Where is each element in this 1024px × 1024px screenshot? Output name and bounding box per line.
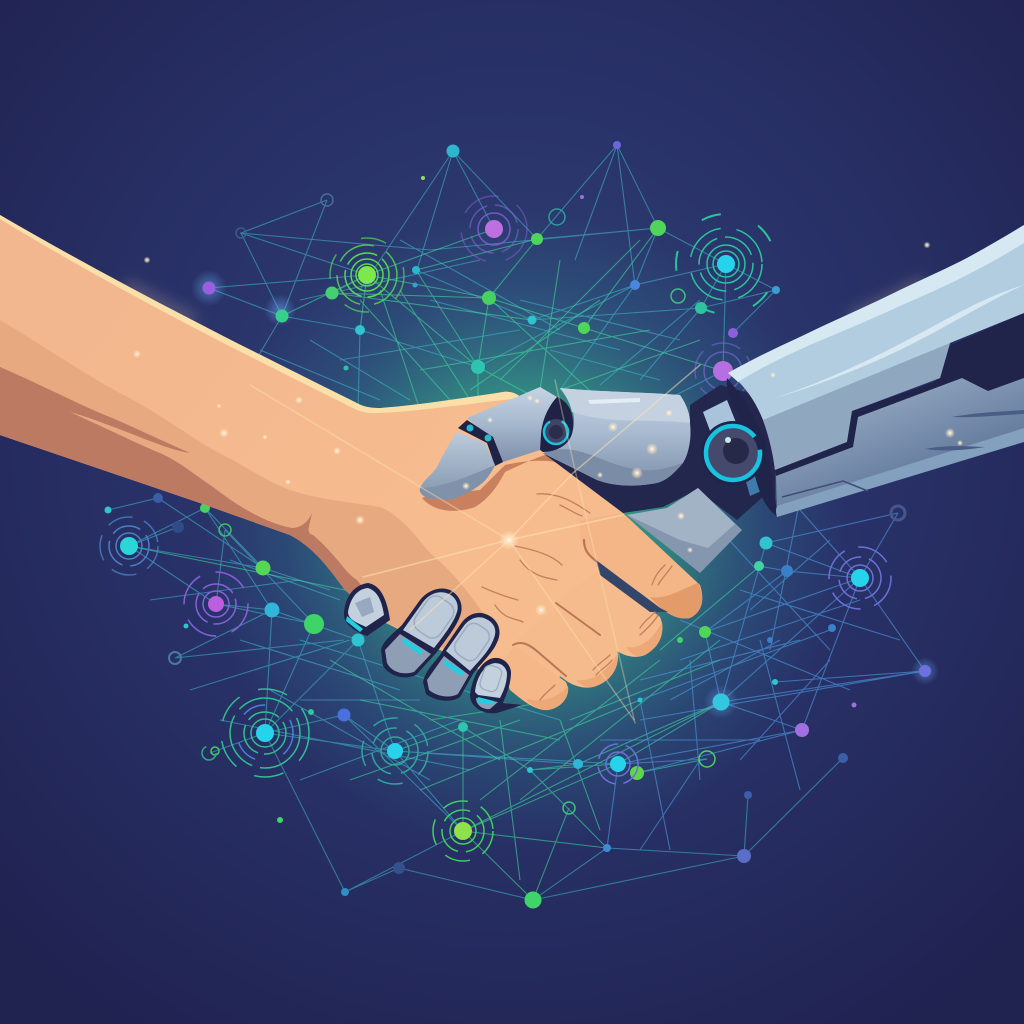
palm highlight stroke — [588, 398, 640, 404]
forearm lower shade — [763, 343, 950, 470]
forearm streak — [772, 285, 1024, 399]
pinky finger shade — [525, 686, 568, 710]
human arm and hand — [0, 215, 702, 710]
wrist eye joint — [701, 421, 765, 485]
light flare over handshake — [250, 365, 700, 723]
pinky finger — [500, 645, 568, 710]
hub: purple right of cuff — [695, 343, 751, 399]
thumb band lights — [466, 424, 492, 442]
forearm scratch marks — [925, 410, 1024, 450]
thumb shadow on hand — [422, 455, 575, 511]
thumb tip shade — [420, 465, 495, 500]
network nodes: plain dots — [104, 141, 939, 908]
thumb segment — [467, 387, 557, 462]
palm plate — [543, 388, 691, 486]
index finger shade — [650, 583, 702, 619]
index finger — [579, 513, 702, 619]
hub: cyan far right — [829, 547, 891, 609]
arm mid shade band — [0, 320, 500, 660]
hub: green bottom — [433, 801, 493, 861]
forearm cuff socket — [727, 378, 778, 517]
grey lower hand plate — [627, 488, 742, 573]
forearm main panel — [728, 225, 1024, 470]
hub: cyan upper right — [676, 214, 776, 314]
lower seam — [782, 481, 868, 497]
network connection lines — [108, 145, 925, 900]
robot finger C — [423, 613, 500, 701]
hub: cyan far left — [100, 517, 158, 575]
green glow behind hands — [205, 210, 845, 850]
forearm dark panel — [935, 313, 1024, 386]
arm top highlight — [0, 215, 522, 413]
wrist blue bar — [745, 470, 768, 496]
network nodes: hollow rings — [169, 194, 905, 814]
robot finger D — [470, 658, 522, 713]
hub: purple top — [461, 196, 527, 262]
palm lower dark — [543, 449, 683, 486]
palm upper light — [560, 388, 690, 423]
forearm top highlight — [728, 225, 1024, 382]
robot arm — [344, 225, 1024, 713]
wrist neck plate — [703, 400, 737, 436]
hub: cyan lower left with green rings — [221, 689, 309, 777]
thumb joint — [536, 397, 573, 452]
middle finger shade — [626, 622, 662, 656]
forearm lower panel — [776, 378, 1024, 517]
hub: purple left — [184, 572, 248, 636]
ring finger — [513, 605, 618, 688]
arm base shape — [0, 215, 640, 690]
middle finger — [557, 570, 662, 657]
robot finger B — [381, 588, 462, 677]
index finger gap shadow — [596, 560, 668, 612]
ring finger shade — [576, 655, 617, 687]
knuckle wrinkles — [482, 494, 672, 700]
thumb band — [458, 420, 503, 466]
robot finger A — [344, 583, 390, 636]
lower plate highlight — [627, 488, 735, 548]
sparkle particles — [133, 242, 963, 616]
arm dark underside — [0, 367, 385, 620]
thumb tip — [420, 432, 495, 500]
hub: cyan bottom right — [598, 744, 638, 784]
hub: green upper left — [330, 238, 404, 312]
forearm bottom edge — [776, 428, 1024, 517]
forearm dark seam — [775, 370, 1024, 476]
hub: cyan lower middle — [362, 718, 428, 784]
dark wrist mechanism — [543, 385, 775, 520]
soft rim light above arms — [125, 282, 925, 322]
finger separating creases — [513, 540, 600, 676]
